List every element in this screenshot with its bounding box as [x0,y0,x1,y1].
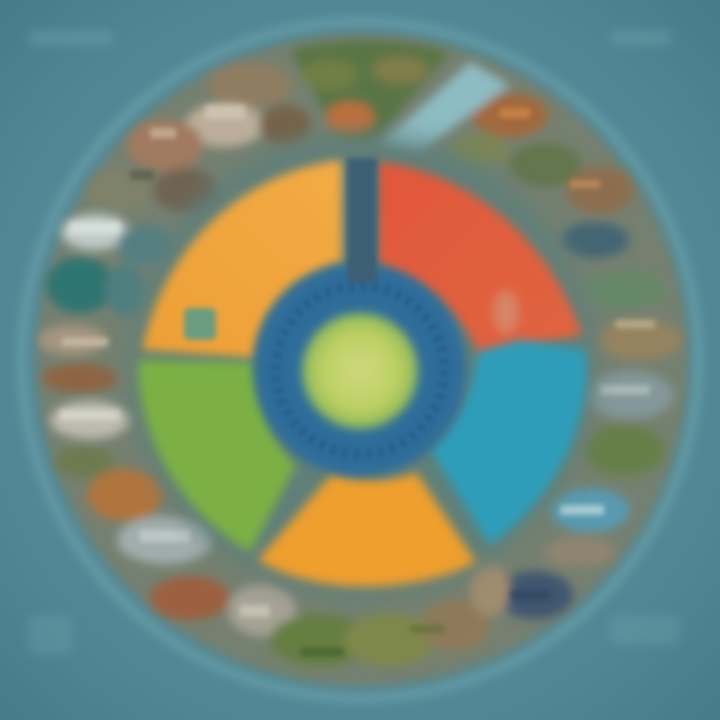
ring patches [38,40,682,666]
inner ring shadow [130,133,594,597]
central pie [138,158,587,587]
segment: bottom orange [258,472,476,587]
dark vertical bar [347,158,377,283]
segment: orange [142,160,342,358]
centre green disc [302,313,418,429]
segment: green [138,360,296,552]
ring dots [276,286,444,454]
segment: blue [430,340,587,545]
icon: red smudge [493,290,519,334]
centre blue ring [254,264,466,476]
icon: orange house [184,308,216,340]
corner label smudges [28,30,680,655]
segment: red [378,162,582,356]
ring texture [60,105,655,656]
